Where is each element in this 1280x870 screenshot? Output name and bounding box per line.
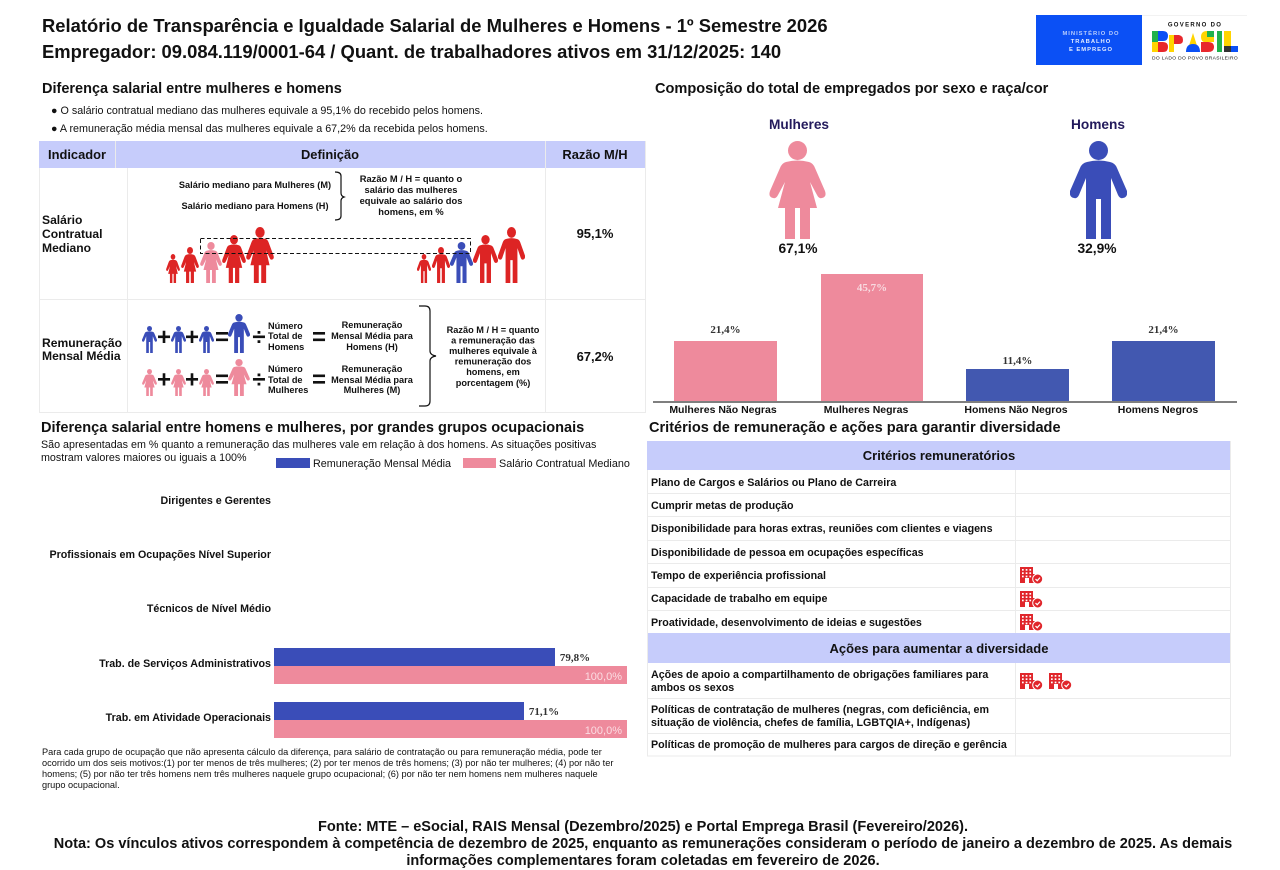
text: bullets: ● O salário contratual mediano das mulheres equivale a 95,1% do recebido pelos homens. bbox=[51, 105, 483, 117]
criteria rows bbox=[651, 477, 993, 629]
row label: salário contratual mediano: Contratual bbox=[42, 227, 102, 241]
axis bbox=[653, 401, 1237, 403]
title: Empregador: 09.084.119/0001-64 / Quant. de trabalhadores ativos em 31/12/2025: 140 bbox=[42, 41, 781, 62]
table header: Razão M/H bbox=[562, 147, 628, 162]
bars: atividade operacional bbox=[274, 702, 627, 738]
bar: homens negros: Homens Negros bbox=[1118, 404, 1198, 416]
formula: homens: Remuneração bbox=[342, 320, 403, 330]
bars: serviços administrativos: 100,0% bbox=[585, 671, 622, 683]
icon: empresa trabalho em equipe bbox=[1020, 591, 1043, 608]
bars: atividade operacional: 100,0% bbox=[585, 725, 622, 737]
icon: empresa apoio familiar bbox=[1020, 673, 1043, 690]
action rows bbox=[651, 669, 1008, 751]
text: nota do gráfico: ocorrido um dos seis motivos:(1) por ter menos de três mulheres; (2) por ter menos de três homens; (3) por não ter mulheres; (4) por não ter bbox=[42, 758, 613, 768]
bracket bbox=[419, 306, 436, 406]
bar: mulheres não negras bbox=[669, 324, 777, 416]
row label: remuneração mensal média: Mensal Média bbox=[42, 349, 121, 363]
bar: mulheres não negras: 21,4% bbox=[710, 324, 741, 336]
heading: diferença por grupos ocupacionais: Diferença salarial entre homens e mulheres, por grandes grupos ocupacionais bbox=[41, 420, 584, 436]
category labels: Profissionais em Ocupações Nível Superior bbox=[49, 549, 271, 561]
text: descrição do gráfico: São apresentadas em % quanto a remuneração das mulheres vale em relação à dos homens. As situações positivas bbox=[41, 439, 596, 451]
bar: homens não negros: 11,4% bbox=[1003, 355, 1032, 367]
formula: mulheres: ÷ bbox=[252, 366, 266, 394]
formula: homens bbox=[142, 314, 414, 353]
formula: mulheres bbox=[142, 359, 414, 396]
row label: salário contratual mediano: Salário bbox=[42, 213, 82, 227]
criteria rows: Disponibilidade para horas extras, reuniões com clientes e viagens bbox=[651, 523, 993, 535]
text: razão M/H remuneração: remuneração dos bbox=[455, 356, 531, 366]
pictogram: homens: Homens bbox=[1071, 117, 1125, 132]
bracket bbox=[335, 172, 344, 220]
formula: mulheres: Remuneração bbox=[342, 364, 403, 374]
formula: homens: + bbox=[157, 324, 171, 351]
text: descrição do gráfico bbox=[41, 439, 596, 464]
formula: mulheres: Total de bbox=[268, 375, 303, 385]
formula: homens: = bbox=[312, 324, 326, 351]
text: razão M/H remuneração: porcentagem (%) bbox=[456, 378, 530, 388]
text: bullets: ● A remuneração média mensal das mulheres equivale a 67,2% da recebida pelos homens. bbox=[51, 123, 488, 135]
logo: Ministério do Trabalho e Emprego: TRABALHO bbox=[1071, 39, 1111, 45]
value: 67,2%: 67,2% bbox=[577, 349, 614, 364]
panel: tabela de critérios bbox=[647, 441, 1231, 756]
formula: homens: Número bbox=[268, 321, 303, 331]
logo: Governo do Brasil: GOVERNO DO bbox=[1168, 22, 1222, 28]
bar: homens não negros: Homens Não Negros bbox=[964, 404, 1068, 416]
bar: mulheres não negras: Mulheres Não Negras bbox=[669, 404, 777, 416]
value: 95,1%: 95,1% bbox=[577, 226, 614, 241]
bar chart: composição por sexo e raça/cor bbox=[653, 274, 1237, 416]
formula: homens: Homens (H) bbox=[346, 342, 398, 352]
bar: mulheres negras: Mulheres Negras bbox=[824, 404, 908, 416]
action rows: Ações de apoio a compartilhamento de obrigações familiares para bbox=[651, 669, 989, 681]
formula: mulheres: = bbox=[215, 366, 229, 394]
action rows: Políticas de contratação de mulheres (negras, com deficiência, em bbox=[651, 704, 989, 716]
pictogram: homens: 32,9% bbox=[1077, 241, 1117, 256]
row label: salário contratual mediano bbox=[42, 213, 102, 255]
footer: fonte e nota: informações complementares foram coletadas em fevereiro de 2026. bbox=[406, 853, 880, 869]
formula: mulheres: Mulheres (M) bbox=[344, 385, 400, 395]
bars: serviços administrativos bbox=[274, 648, 627, 684]
icons: homens ordenados por salário bbox=[417, 227, 525, 283]
icon: empresa tempo de experiência bbox=[1020, 567, 1043, 584]
text: nota do gráfico: homens; (5) por não ter três homens nem três mulheres naquele grupo ocupacional; (6) por não ter nem homens nem mulheres naquele bbox=[42, 769, 598, 779]
category labels: Trab. de Serviços Administrativos bbox=[99, 658, 271, 670]
diagram: remuneração média bbox=[142, 306, 540, 406]
criteria rows: Disponibilidade de pessoa em ocupações específicas bbox=[651, 547, 924, 559]
bar: homens negros bbox=[1112, 324, 1215, 416]
formula: homens: Total de bbox=[268, 331, 303, 341]
criteria rows: Capacidade de trabalho em equipe bbox=[651, 593, 827, 605]
title bbox=[42, 15, 828, 62]
category labels: Técnicos de Nível Médio bbox=[147, 603, 271, 615]
footer: fonte e nota: Fonte: MTE – eSocial, RAIS Mensal (Dezembro/2025) e Portal Emprega Brasil (Fevereiro/2026). bbox=[318, 819, 968, 835]
action rows: situação de violência, chefes de família, LGBTQIA+, Indígenas) bbox=[651, 717, 971, 729]
bar: mulheres negras: 45,7% bbox=[857, 282, 887, 294]
text: razão M/H salário: equivale ao salário dos bbox=[360, 196, 462, 206]
table header: Definição bbox=[301, 147, 359, 162]
bar chart: grupos ocupacionais bbox=[49, 495, 627, 738]
criteria rows: Plano de Cargos e Salários ou Plano de Carreira bbox=[651, 477, 897, 489]
heading: critérios: Critérios de remuneração e ações para garantir diversidade bbox=[649, 420, 1061, 436]
text: razão M/H salário: salário das mulheres bbox=[365, 185, 457, 195]
text: razão M/H remuneração bbox=[447, 325, 540, 388]
logo: Ministério do Trabalho e Emprego: E EMPREGO bbox=[1069, 47, 1113, 53]
text: nota do gráfico bbox=[42, 747, 613, 790]
row label: remuneração mensal média: Remuneração bbox=[42, 336, 122, 350]
formula: homens: = bbox=[215, 324, 229, 351]
bar: homens não negros bbox=[964, 355, 1069, 416]
row label: salário contratual mediano: Mediano bbox=[42, 241, 91, 255]
table heading: critérios remuneratórios: Critérios remuneratórios bbox=[863, 448, 1015, 463]
icons: mulheres ordenadas por salário bbox=[166, 227, 274, 283]
criteria rows: Cumprir metas de produção bbox=[651, 500, 794, 512]
title: Relatório de Transparência e Igualdade Salarial de Mulheres e Homens - 1º Semestre 2026 bbox=[42, 15, 828, 36]
formula: mulheres: + bbox=[157, 366, 171, 394]
icon: empresa proatividade bbox=[1020, 614, 1043, 631]
category labels: Trab. em Atividade Operacionais bbox=[106, 712, 271, 724]
criteria rows: Tempo de experiência profissional bbox=[651, 570, 826, 582]
text: salário mediano labels: Salário mediano para Mulheres (M) bbox=[179, 180, 331, 190]
legend: Salário Contratual Mediano bbox=[499, 458, 630, 470]
logo: Ministério do Trabalho e Emprego: MINISTÉRIO DO bbox=[1062, 29, 1120, 37]
icon: empresa apoio familiar 2 bbox=[1049, 673, 1072, 690]
bars: serviços administrativos: 79,8% bbox=[560, 652, 590, 664]
formula: mulheres: = bbox=[312, 366, 326, 394]
text: razão M/H salário bbox=[360, 174, 463, 217]
formula: homens: ÷ bbox=[252, 324, 266, 351]
legend: Remuneração Mensal Média bbox=[313, 458, 451, 470]
logo: Governo do Brasil bbox=[1142, 16, 1247, 62]
heading: composição: Composição do total de empregados por sexo e raça/cor bbox=[655, 81, 1049, 97]
formula: mulheres: Número bbox=[268, 364, 303, 374]
table heading: ações: Ações para aumentar a diversidade bbox=[830, 641, 1048, 656]
text: salário mediano labels: Salário mediano para Homens (H) bbox=[181, 201, 329, 211]
formula: mulheres: Mensal Média para bbox=[331, 375, 414, 385]
category labels: Dirigentes e Gerentes bbox=[161, 495, 271, 507]
criteria rows: Proatividade, desenvolvimento de ideias e sugestões bbox=[651, 617, 922, 629]
table header bbox=[48, 147, 628, 162]
text: razão M/H remuneração: homens, em bbox=[466, 367, 520, 377]
text: razão M/H salário: homens, em % bbox=[378, 207, 444, 217]
pictogram: mulheres: Mulheres bbox=[769, 117, 829, 132]
text: razão M/H salário: Razão M / H = quanto o bbox=[360, 174, 463, 184]
table header: Indicador bbox=[48, 147, 106, 162]
text: razão M/H remuneração: mulheres equivale à bbox=[449, 346, 538, 356]
bars: atividade operacional: 71,1% bbox=[529, 706, 559, 718]
formula: homens: Homens bbox=[268, 342, 304, 352]
formula: mulheres: Mulheres bbox=[268, 385, 308, 395]
category labels bbox=[49, 495, 271, 724]
action rows: Políticas de promoção de mulheres para cargos de direção e gerência bbox=[651, 739, 1008, 751]
footer: fonte e nota bbox=[54, 819, 1232, 869]
heading: diferença salarial: Diferença salarial entre mulheres e homens bbox=[42, 81, 342, 97]
pictogram: mulheres: 67,1% bbox=[778, 241, 818, 256]
text: razão M/H remuneração: Razão M / H = quanto bbox=[447, 325, 540, 335]
panel: tabela de indicadores bbox=[39, 141, 646, 413]
text: descrição do gráfico: mostram valores maiores ou iguais a 100% bbox=[41, 452, 247, 464]
pictogram: homens bbox=[1070, 117, 1127, 256]
bar: homens negros: 21,4% bbox=[1148, 324, 1179, 336]
action rows: ambos os sexos bbox=[651, 682, 734, 694]
text: salário mediano labels bbox=[179, 180, 331, 211]
logo: Governo do Brasil: DO LADO DO POVO BRASILEIRO bbox=[1152, 56, 1238, 62]
text: bullets bbox=[51, 105, 488, 135]
formula: homens: Mensal Média para bbox=[331, 331, 414, 341]
logo: Ministério do Trabalho e Emprego bbox=[1036, 15, 1142, 65]
row label: remuneração mensal média bbox=[42, 336, 122, 363]
formula: mulheres: + bbox=[185, 366, 199, 394]
text: nota do gráfico: grupo ocupacional. bbox=[42, 780, 120, 790]
formula: homens: + bbox=[185, 324, 199, 351]
bar: mulheres negras bbox=[821, 274, 923, 416]
dashed median box bbox=[200, 238, 470, 254]
diagram: salário mediano bbox=[166, 172, 525, 283]
text: razão M/H remuneração: a remuneração das bbox=[451, 336, 535, 346]
pictogram: mulheres bbox=[769, 117, 829, 256]
footer: fonte e nota: Nota: Os vínculos ativos correspondem à competência de dezembro de 2025, enquanto as remunerações consideram o período de janeiro a dezembro de 2025. As demais bbox=[54, 836, 1232, 852]
text: nota do gráfico: Para cada grupo de ocupação que não apresenta cálculo da diferença, para salário de contratação ou para remuneração média, pode ter bbox=[42, 747, 602, 757]
legend bbox=[276, 458, 630, 470]
